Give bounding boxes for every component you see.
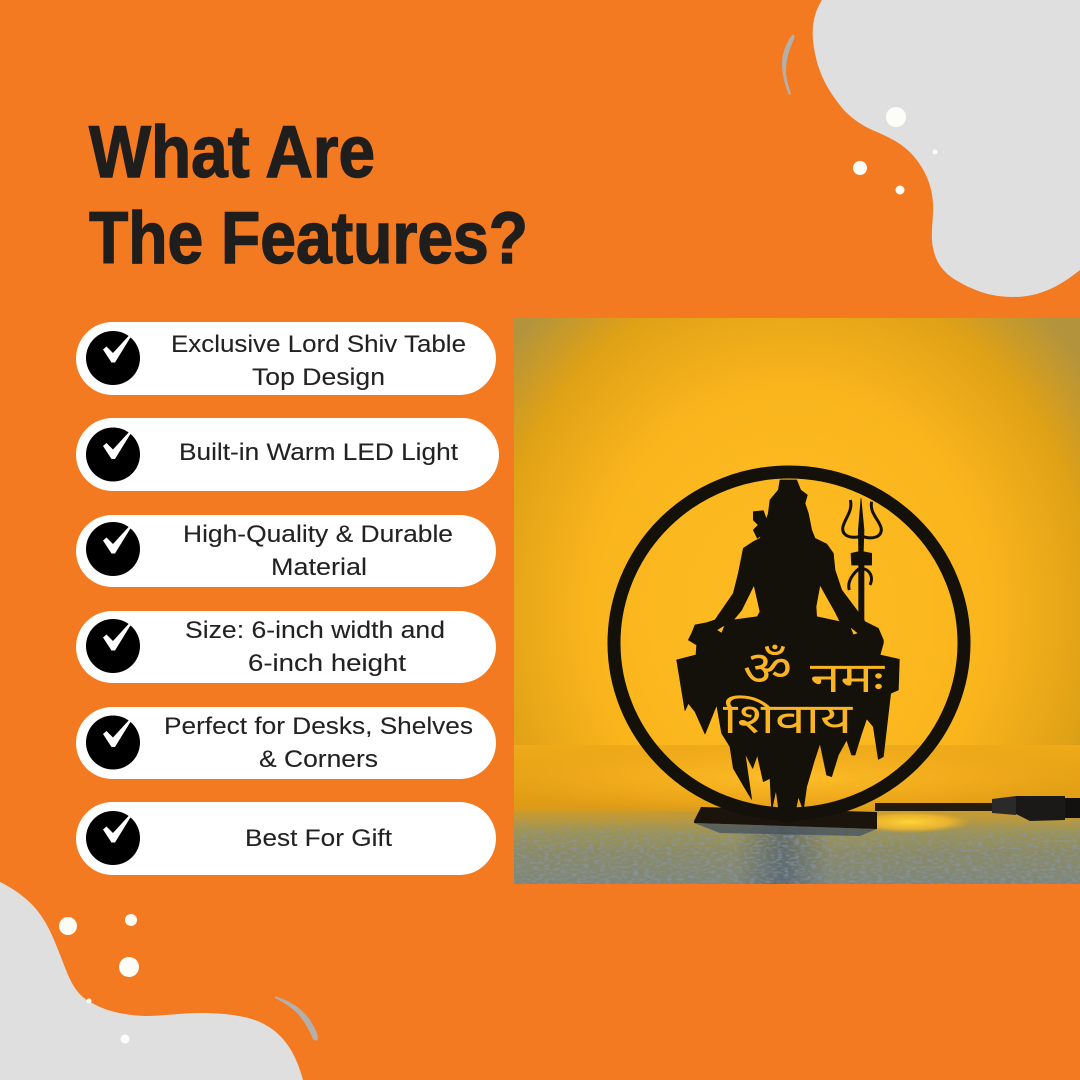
feature pill: material: Material <box>271 554 367 581</box>
serpent <box>753 511 767 538</box>
feature pill: material: High-Quality & Durable <box>183 521 453 548</box>
trident <box>843 498 881 623</box>
accent stroke: top <box>782 35 795 95</box>
title: The Features? <box>89 198 528 279</box>
accent stroke: bottom <box>275 996 318 1040</box>
feature pill: placement: Perfect for Desks, Shelves <box>164 713 473 740</box>
feature pill: material <box>76 515 496 587</box>
feature pill: exclusive design <box>76 322 496 395</box>
base shadow <box>694 823 877 836</box>
title: What Are <box>89 112 375 193</box>
title <box>89 112 528 279</box>
ring <box>614 472 964 814</box>
feature pill: exclusive design: Top Design <box>252 364 385 391</box>
feature pill: exclusive design: Exclusive Lord Shiv Table <box>171 331 466 358</box>
feature pill: size: Size: 6-inch width and <box>185 617 445 644</box>
feature pill: LED light <box>76 418 499 491</box>
mantra cut-out: शिवाय <box>723 695 853 742</box>
decorative blob: top right <box>782 0 1080 297</box>
dots: top right <box>853 107 938 194</box>
seated figure <box>677 480 899 822</box>
lit wall <box>514 318 1080 748</box>
feature pill: gift <box>76 802 496 875</box>
product photo: Lord Shiv table lamp <box>490 318 1080 884</box>
feature list <box>76 322 499 875</box>
mantra cut-out: नमः <box>810 654 886 701</box>
mantra cut-out <box>723 644 885 734</box>
decorative blob: bottom left <box>0 882 318 1080</box>
mantra cut-out: ॐ <box>743 643 792 696</box>
power cable and connector <box>875 796 1080 821</box>
feature pill: gift: Best For Gift <box>245 825 392 852</box>
feature pill: size: 6-inch height <box>248 650 406 677</box>
table surface <box>490 740 1080 884</box>
lamp silhouette <box>677 480 899 822</box>
feature pill: size <box>76 611 496 683</box>
feature pill: LED light: Built-in Warm LED Light <box>179 439 458 466</box>
feature pill: placement <box>76 707 496 779</box>
base <box>694 807 877 829</box>
feature pill: placement: & Corners <box>259 746 378 773</box>
dots: bottom left <box>59 914 139 1044</box>
